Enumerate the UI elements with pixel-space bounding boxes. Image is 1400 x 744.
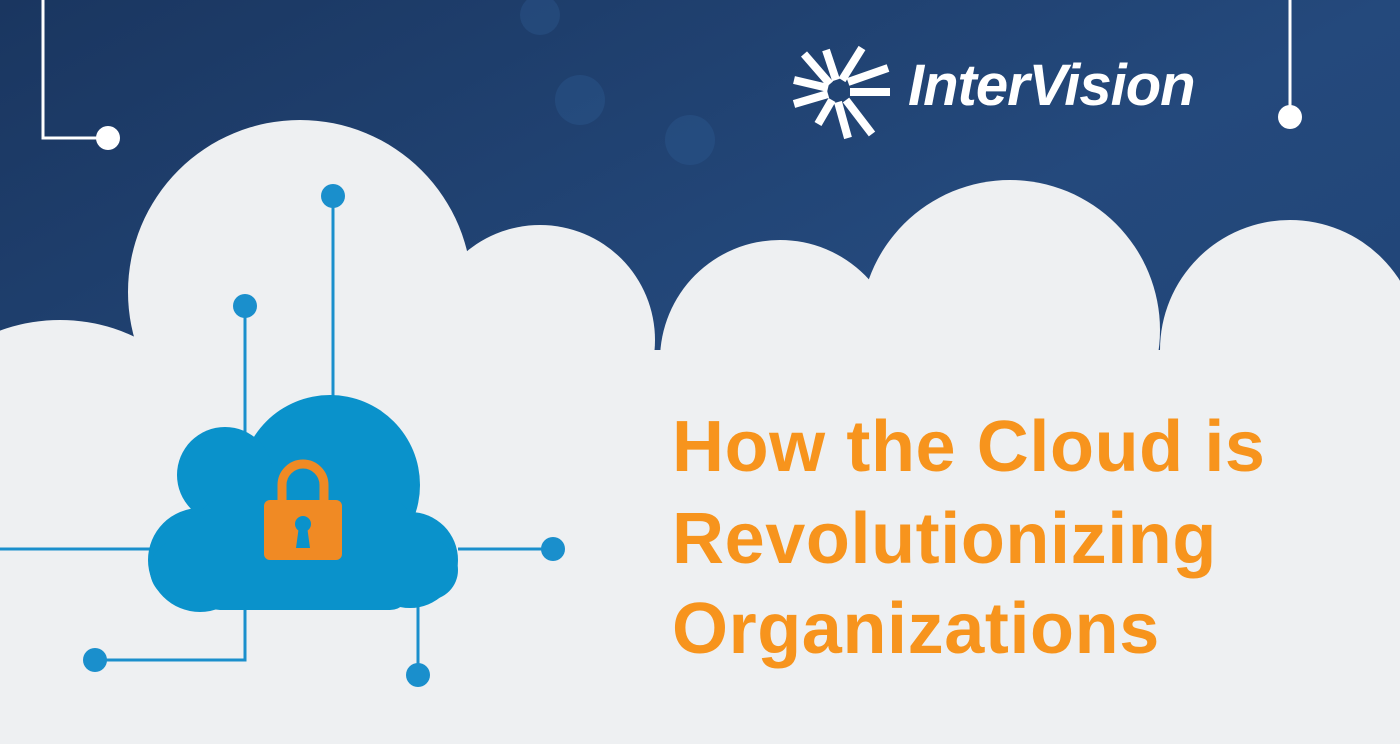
lock icon: [264, 464, 342, 560]
title: How the Cloud is: [672, 407, 1266, 487]
logo: InterVision: [908, 53, 1195, 118]
corner bracket left: [43, 0, 1290, 138]
circuit cloud icon: [0, 184, 565, 687]
title: Organizations: [672, 589, 1160, 669]
title: Revolutionizing: [672, 499, 1217, 579]
logo: [792, 46, 1195, 140]
title: [672, 407, 1266, 669]
blue cloud: [148, 395, 458, 612]
